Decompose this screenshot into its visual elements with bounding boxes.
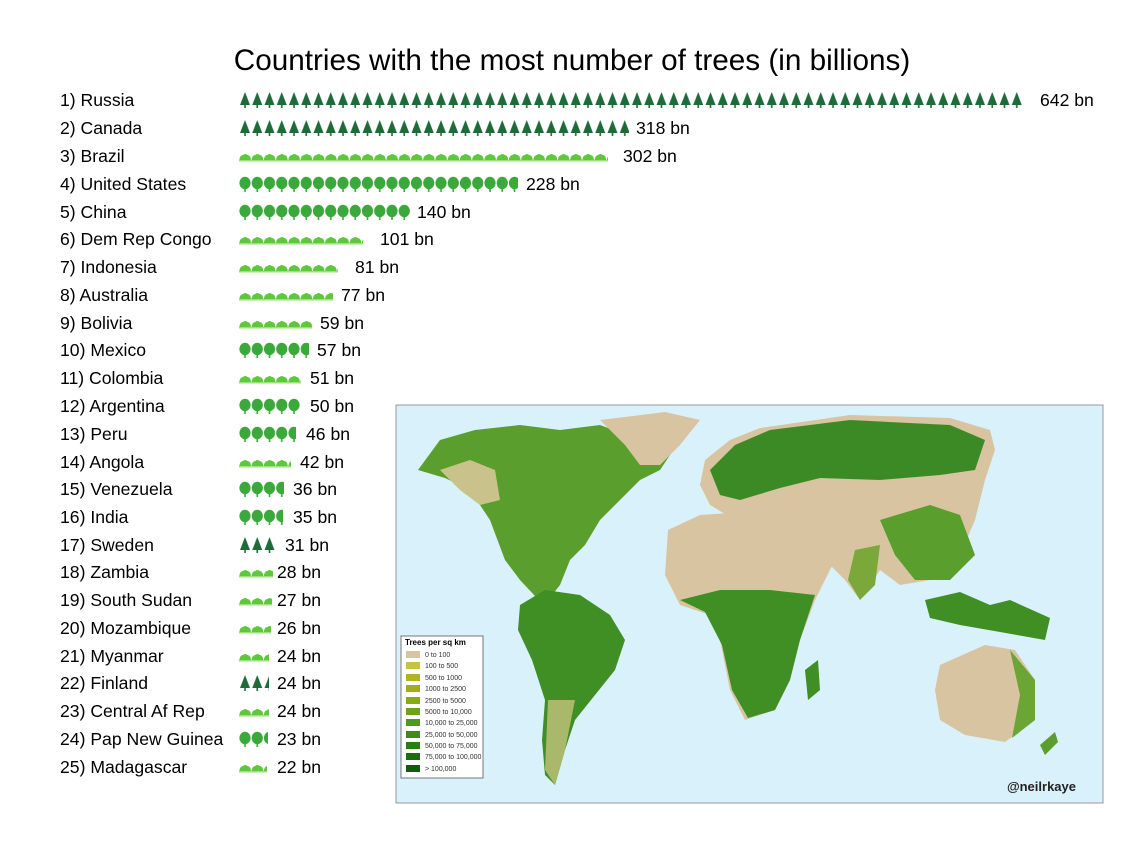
ranking list: 4) United States	[60, 174, 186, 194]
legend: 5000 to 10,000	[425, 709, 472, 716]
ranking list: 9) Bolivia	[60, 313, 133, 333]
ranking list: 16) India	[60, 507, 129, 527]
ranking list: 22) Finland	[60, 673, 148, 693]
ranking list: 6) Dem Rep Congo	[60, 229, 212, 249]
ranking list: 77 bn	[341, 285, 385, 305]
ranking list: 31 bn	[285, 535, 329, 555]
ranking list: 42 bn	[300, 452, 344, 472]
Eurasia base	[700, 415, 995, 600]
ranking list: 46 bn	[306, 424, 350, 444]
world map	[396, 405, 1103, 803]
legend: 10,000 to 25,000	[425, 720, 478, 727]
ranking list: 81 bn	[355, 257, 399, 277]
ranking list: 2) Canada	[60, 118, 142, 138]
ranking list: 19) South Sudan	[60, 590, 192, 610]
legend: 100 to 500	[425, 663, 458, 670]
ranking list: 7) Indonesia	[60, 257, 157, 277]
ranking list: 59 bn	[320, 313, 364, 333]
ranking list: 5) China	[60, 202, 127, 222]
ranking list: 22 bn	[277, 757, 321, 777]
ranking list: 24 bn	[277, 701, 321, 721]
Australia	[935, 645, 1035, 742]
ranking list: 11) Colombia	[60, 368, 164, 388]
legend: > 100,000	[425, 766, 456, 773]
legend: 25,000 to 50,000	[425, 732, 478, 739]
legend: 500 to 1000	[425, 675, 462, 682]
ranking list: 228 bn	[526, 174, 580, 194]
ranking list: 8) Australia	[60, 285, 148, 305]
ranking list: 14) Angola	[60, 452, 144, 472]
ranking list: 50 bn	[310, 396, 354, 416]
South America	[518, 590, 625, 785]
credit: @neilrkaye	[1007, 779, 1076, 794]
ranking list: 101 bn	[380, 229, 434, 249]
ranking list: 25) Madagascar	[60, 757, 187, 777]
ranking list: 302 bn	[623, 146, 677, 166]
legend: Trees per sq km	[405, 638, 466, 647]
legend	[401, 636, 483, 778]
North America	[418, 425, 670, 600]
ranking list: 35 bn	[293, 507, 337, 527]
SE Asia islands	[925, 592, 1050, 640]
ranking list: 642 bn	[1040, 90, 1094, 110]
ranking list: 15) Venezuela	[60, 479, 173, 499]
Africa	[665, 512, 835, 720]
Eurasia forest belt	[710, 420, 985, 500]
ranking list: 26 bn	[277, 618, 321, 638]
ranking list: 24 bn	[277, 673, 321, 693]
legend: 1000 to 2500	[425, 686, 466, 693]
ranking list: 23 bn	[277, 729, 321, 749]
ranking list: 18) Zambia	[60, 562, 149, 582]
ranking list: 17) Sweden	[60, 535, 154, 555]
legend: 50,000 to 75,000	[425, 743, 478, 750]
ranking list: 10) Mexico	[60, 340, 146, 360]
ranking list: 3) Brazil	[60, 146, 125, 166]
ranking list: 57 bn	[317, 340, 361, 360]
ranking list: 51 bn	[310, 368, 354, 388]
ranking list: 20) Mozambique	[60, 618, 191, 638]
legend: 0 to 100	[425, 652, 450, 659]
ranking list: 140 bn	[417, 202, 471, 222]
ranking list: 24) Pap New Guinea	[60, 729, 224, 749]
ranking list: 12) Argentina	[60, 396, 165, 416]
ranking list: 13) Peru	[60, 424, 127, 444]
ranking list: 21) Myanmar	[60, 646, 164, 666]
ranking list: 28 bn	[277, 562, 321, 582]
ranking list: 1) Russia	[60, 90, 135, 110]
ranking list	[60, 90, 1094, 777]
ranking list: 23) Central Af Rep	[60, 701, 205, 721]
title: Countries with the most number of trees (in billions)	[234, 44, 910, 77]
ranking list: 318 bn	[636, 118, 690, 138]
legend: 2500 to 5000	[425, 698, 466, 705]
ranking list: 24 bn	[277, 646, 321, 666]
Greenland	[600, 412, 700, 465]
ranking list: 36 bn	[293, 479, 337, 499]
legend: 75,000 to 100,000	[425, 754, 482, 761]
ranking list: 27 bn	[277, 590, 321, 610]
